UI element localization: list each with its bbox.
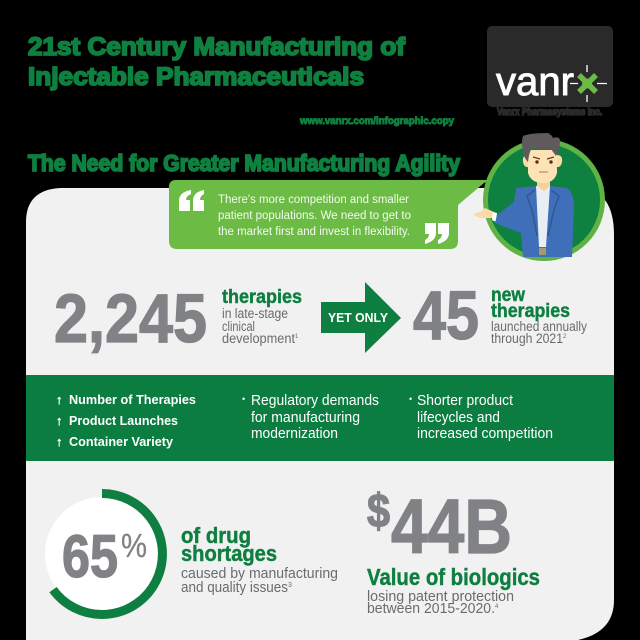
section heading: The Need for Greater Manufacturing Agility	[28, 150, 460, 176]
title: 21st Century Manufacturing of	[28, 33, 406, 61]
donut chart: 65%	[45, 494, 162, 614]
cuff	[492, 212, 497, 222]
band text: shorter lifecycles: lifecycles and	[417, 410, 500, 426]
stat: 45 new therapies: launched annually	[491, 319, 587, 334]
jacket	[495, 186, 574, 257]
hair	[522, 133, 560, 162]
lapels	[527, 190, 559, 236]
band text: regulatory demands: modernization	[251, 426, 338, 442]
stat: 45 new therapies: 2	[563, 334, 567, 340]
band list: increases: Container Variety	[69, 435, 173, 449]
logo: vanrx: Vanrx Pharmasystems Inc.	[497, 107, 602, 118]
band list: increases: Number of Therapies	[69, 393, 196, 407]
band text: shorter lifecycles: •	[409, 394, 412, 404]
portrait: businessman in circle	[473, 133, 605, 261]
stat: 2,245 therapies: 2,245	[54, 280, 207, 357]
face	[528, 150, 557, 183]
source link: www.vanrx.com/infographic.copy	[299, 115, 454, 127]
band list: increases: ↑	[56, 414, 62, 428]
stat: $44B biologics: between 2015-2020.	[367, 601, 495, 617]
arrow: yet only: YET ONLY	[328, 311, 389, 325]
background panel	[26, 188, 614, 640]
band text: regulatory demands: for manufacturing	[251, 410, 360, 426]
stat text: drug shortages: caused by manufacturing	[181, 566, 338, 582]
stat: 2,245 therapies: clinical	[222, 319, 255, 334]
quote bubble	[169, 180, 490, 249]
stat text: drug shortages: and quality issues	[181, 580, 288, 596]
stat: 45 new therapies: 45	[413, 277, 479, 354]
band text: regulatory demands: Regulatory demands	[251, 393, 379, 409]
stat: $44B biologics: 44B	[391, 484, 512, 570]
stat: $44B biologics	[367, 484, 540, 617]
neck	[537, 178, 550, 191]
title: Injectable Pharmaceuticals	[28, 63, 364, 91]
quote text: patient populations. We need to get to	[218, 210, 411, 222]
title	[28, 33, 406, 91]
stat: 2,245 therapies: development	[222, 331, 295, 346]
stat text: drug shortages: shortages	[181, 541, 277, 566]
donut chart: 65%: 65	[62, 523, 118, 590]
hand	[473, 208, 494, 218]
eyes and mouth	[533, 157, 554, 159]
logo: vanrx	[487, 26, 613, 118]
arrow: yet only	[321, 282, 401, 353]
donut chart: 65%: %	[121, 527, 147, 564]
stat: 45 new therapies: through 2021	[491, 331, 563, 346]
quote text: the market first and invest in flexibility.	[218, 226, 410, 238]
ears	[523, 155, 562, 167]
stat: 2,245 therapies: in late-stage	[222, 306, 288, 321]
stat: 2,245 therapies: 1	[295, 334, 299, 340]
shirt	[536, 186, 550, 247]
stat: 45 new therapies: therapies	[491, 300, 570, 322]
stat text: drug shortages: of drug	[181, 523, 251, 548]
stat: 2,245 therapies	[54, 280, 302, 357]
stat: 2,245 therapies: therapies	[222, 286, 302, 308]
green band	[26, 375, 614, 461]
band text: shorter lifecycles	[409, 393, 553, 442]
stat text: drug shortages: 3	[288, 582, 292, 589]
icon: closing quote	[425, 223, 449, 244]
band list: increases: ↑	[56, 435, 62, 449]
band text: regulatory demands: •	[242, 394, 245, 404]
stat: $44B biologics: losing patent protection	[367, 589, 514, 605]
band text: regulatory demands	[242, 393, 379, 442]
band text: shorter lifecycles: Shorter product	[417, 393, 513, 409]
band list: increases: Product Launches	[69, 414, 178, 428]
belt	[539, 248, 546, 255]
stat: 45 new therapies: new	[491, 284, 526, 306]
band text: shorter lifecycles: increased competition	[417, 426, 553, 442]
stat: $44B biologics: 4	[495, 604, 499, 610]
stat: $44B biologics: $	[367, 484, 390, 537]
band list: increases	[56, 393, 196, 449]
band list: increases: ↑	[56, 393, 62, 407]
quote text	[218, 194, 411, 238]
logo: vanrx: vanr	[496, 60, 574, 104]
stat: $44B biologics: Value of biologics	[367, 564, 540, 590]
quote text: There's more competition and smaller	[218, 194, 409, 206]
icon: opening quote	[179, 190, 204, 211]
stat: 45 new therapies	[413, 277, 587, 354]
stat text: drug shortages	[181, 523, 338, 596]
